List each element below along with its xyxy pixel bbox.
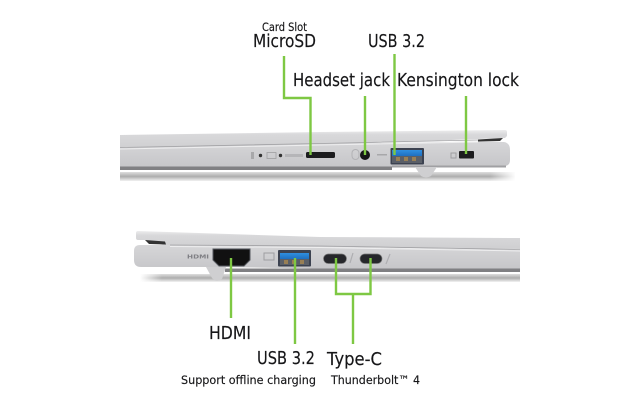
label: Kensington lock: Kensington lock [397,71,520,91]
base edge [225,268,520,272]
lid of bottom laptop [136,231,520,249]
label: top USB 3.2: USB 3.2 [368,32,425,52]
callout line: Type-C [336,258,370,344]
label: Type-C: Type-C [326,350,382,370]
shadow under top laptop [120,172,516,181]
label: HDMI: HDMI [209,324,251,344]
HDMI label: HDMI [187,254,209,260]
callout line: headset jack [364,96,366,155]
label: Support offline charging: Support offline charging [181,373,316,387]
label: Headset jack: Headset jack [293,71,391,91]
hinge gap [145,240,166,244]
headset icon [352,150,359,160]
label: bottom USB 3.2: USB 3.2 [257,349,315,369]
Type-C port 2 [360,254,382,264]
headset jack [360,150,370,160]
USB icon [377,154,387,156]
charging icon [264,253,274,260]
status icons [251,152,303,159]
callout line: HDMI [230,258,232,318]
lid of top laptop [120,130,507,149]
lid seam lines [170,245,520,250]
HDMI port [213,249,250,266]
label: Card Slot: Card Slot [262,20,307,34]
lock icon [451,153,456,158]
callout line: bottom USB 3.2 [294,258,296,344]
label: Thunderbolt 4: Thunderbolt™ 4 [330,373,420,387]
USB 3.2 port [278,250,311,266]
lid seam lines [120,140,478,148]
body of top laptop [120,142,510,167]
hinge gap [478,138,503,142]
callout line: MicroSD [284,56,310,155]
shadow under bottom laptop [140,274,520,282]
Type-C port 1 [324,254,346,264]
callout line: Kensington lock [465,96,467,154]
bottom laptop side view [134,231,520,282]
body of bottom laptop [134,245,520,269]
USB 3.2 port [390,148,424,164]
front foot [206,267,226,281]
callout line: top USB 3.2 [393,54,396,155]
Thunderbolt mark 2 [386,254,390,264]
rear foot [415,167,437,178]
top laptop side view [120,130,516,181]
MicroSD slot [306,152,335,158]
label: MicroSD: MicroSD [253,32,316,52]
base edge [120,166,392,170]
Kensington slot [459,151,474,158]
Thunderbolt mark 1 [350,253,353,263]
